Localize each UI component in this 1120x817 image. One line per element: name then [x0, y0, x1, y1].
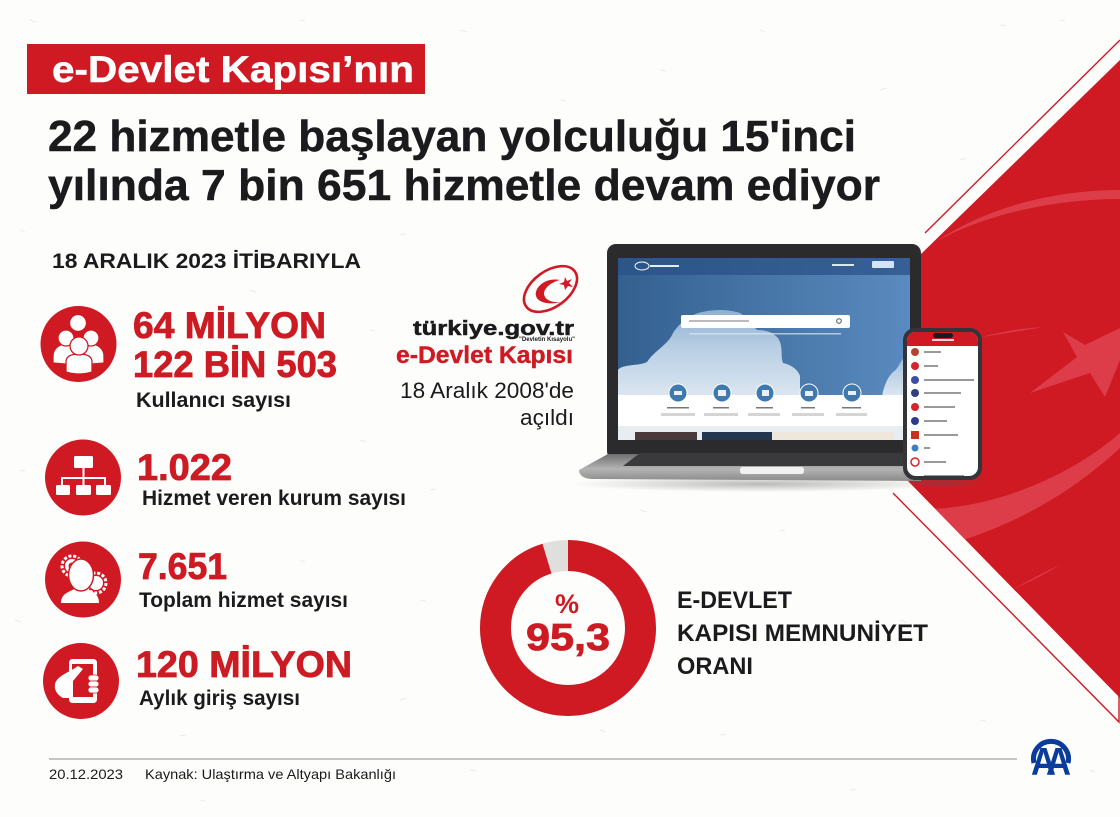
logo wordmark	[413, 318, 575, 343]
donut label	[677, 587, 928, 680]
footer date and source	[49, 766, 396, 782]
heading banner	[27, 44, 425, 94]
logo: crescent and star	[516, 257, 585, 321]
opening date	[400, 378, 574, 430]
heading banner: e-Devlet Kapısı’nın	[52, 49, 414, 90]
value: 64 MİLYON	[133, 305, 326, 346]
e-Devlet Kapısı label: e-Devlet Kapısı	[396, 342, 573, 369]
logo wordmark: "Devletin Kısayolu"	[519, 337, 575, 343]
opening date: açıldı	[520, 405, 574, 430]
value: 120 MİLYON	[136, 644, 352, 685]
red flag shape with crescent and star	[908, 60, 1120, 698]
stat: users	[40, 305, 337, 412]
value	[133, 305, 337, 385]
value: 122 BİN 503	[133, 344, 337, 385]
donut label: ORANI	[677, 653, 753, 680]
donut label: KAPISI MEMNUNİYET	[677, 620, 928, 647]
decorative diagonal line top	[925, 40, 1120, 233]
footer date and source: Kaynak: Ulaştırma ve Altyapı Bakanlığı	[145, 766, 396, 782]
donut chart 95,3%	[496, 556, 640, 700]
icon: AA logo: A	[1046, 741, 1071, 784]
icon: people	[40, 306, 116, 382]
donut chart 95,3%: 95,3	[526, 617, 610, 659]
label: Kullanıcı sayısı	[136, 389, 291, 412]
label: Aylık giriş sayısı	[139, 687, 300, 710]
stat: services	[45, 542, 348, 618]
footer date and source: 20.12.2023	[49, 766, 123, 782]
date subtitle: 18 ARALIK 2023 İTİBARIYLA	[52, 250, 361, 273]
stat: monthly logins	[43, 643, 352, 719]
title	[48, 112, 880, 210]
icon: org chart	[45, 440, 121, 516]
icon: person with gears	[45, 542, 121, 618]
stat: institutions	[45, 440, 406, 516]
value: 7.651	[138, 546, 227, 587]
icon: AA logo: A	[1031, 741, 1056, 784]
title: 22 hizmetle başlayan yolculuğu 15'inci	[48, 112, 856, 161]
label: Toplam hizmet sayısı	[139, 589, 348, 612]
opening date: 18 Aralık 2008'de	[400, 378, 574, 403]
laptop base	[579, 454, 921, 481]
value: 1.022	[137, 447, 232, 488]
donut label: E-DEVLET	[677, 587, 792, 614]
laptop screen	[618, 258, 910, 440]
laptop mockup	[579, 244, 921, 491]
icon: hand holding phone	[43, 643, 119, 719]
title: yılında 7 bin 651 hizmetle devam ediyor	[48, 161, 880, 210]
phone mockup	[903, 328, 985, 488]
label: Hizmet veren kurum sayısı	[142, 487, 406, 510]
donut chart 95,3%: %	[555, 589, 579, 619]
decorative diagonal line bottom	[893, 493, 1119, 722]
logo wordmark: türkiye.gov.tr	[413, 318, 574, 340]
